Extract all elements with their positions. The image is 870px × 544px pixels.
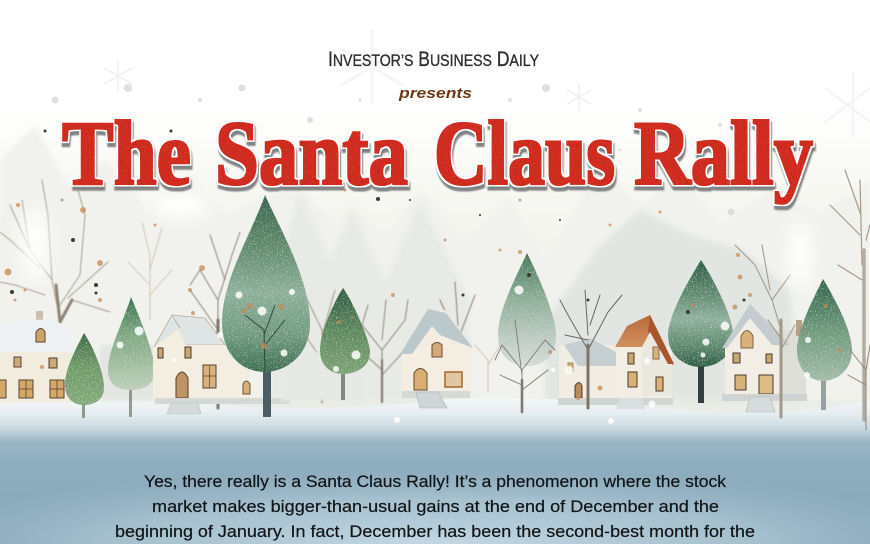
house: grey gable right <box>722 304 807 412</box>
white mist glows <box>21 191 812 290</box>
bare tree: edge top right <box>830 170 870 420</box>
main title: The Santa Claus Rally: Santa <box>215 102 408 204</box>
fir tree: small left <box>65 333 104 418</box>
house: blue roof <box>400 309 473 408</box>
bare tree: over pale fir <box>495 320 555 412</box>
fir tree: pale left <box>108 297 155 417</box>
fir tree: pale centre right <box>498 253 556 366</box>
intro paragraph: market makes bigger-than-usual gains at the end of December and the <box>152 498 719 516</box>
bare tree: tall right <box>735 245 795 417</box>
bare trees behind the village <box>0 180 500 408</box>
pale mountains <box>0 125 870 400</box>
intro paragraph: Yes, there really is a Santa Claus Rally! It’s a phenomenon where the stock <box>144 473 727 491</box>
bare tree: behind fir <box>305 290 335 402</box>
fir tree: right <box>797 279 852 410</box>
snowflake centre <box>340 30 404 104</box>
snowflake right <box>825 72 870 138</box>
bare tree: faint right of house <box>475 345 500 392</box>
bare trees in the right foreground <box>735 170 870 430</box>
falling snow and confetti dots <box>4 84 842 424</box>
house: cream with arched door <box>153 315 290 414</box>
snowflake left <box>104 60 132 92</box>
bare tree: left of big tree <box>190 232 240 408</box>
main title: The Santa Claus Rally: Rally <box>634 102 813 204</box>
publisher logo: Investor's Business Daily: INVESTOR’S BUSINESS DAILY <box>328 48 539 71</box>
fir tree: centre left <box>320 288 370 400</box>
background block behind left trees <box>100 345 160 400</box>
presents line: presents <box>398 85 472 102</box>
bare tree: faint left <box>128 222 172 320</box>
background sky <box>0 0 870 420</box>
fir tree: large <box>222 195 310 417</box>
intro paragraph: beginning of January. In fact, December has been the second-best month for the <box>115 523 755 541</box>
main title: The Santa Claus Rally: The <box>62 102 191 204</box>
house: orange roof <box>558 315 674 409</box>
background block behind large tree <box>282 352 364 401</box>
bare tree: centre <box>360 300 408 402</box>
main title: The Santa Claus Rally <box>62 102 813 204</box>
fir tree: dark right <box>668 260 733 403</box>
bare tree: over orange-roof house <box>560 290 622 408</box>
bare tree: edge bottom right <box>848 345 870 430</box>
intro paragraph <box>115 473 755 541</box>
snowflakes <box>104 30 870 138</box>
bare tree: over white house <box>432 282 475 395</box>
snowy ground <box>0 398 870 544</box>
bare tree: far left <box>0 180 110 322</box>
house: left with snowy roof <box>0 311 75 402</box>
snowflake mid right <box>567 83 591 111</box>
main title: The Santa Claus Rally: Claus <box>434 102 615 204</box>
